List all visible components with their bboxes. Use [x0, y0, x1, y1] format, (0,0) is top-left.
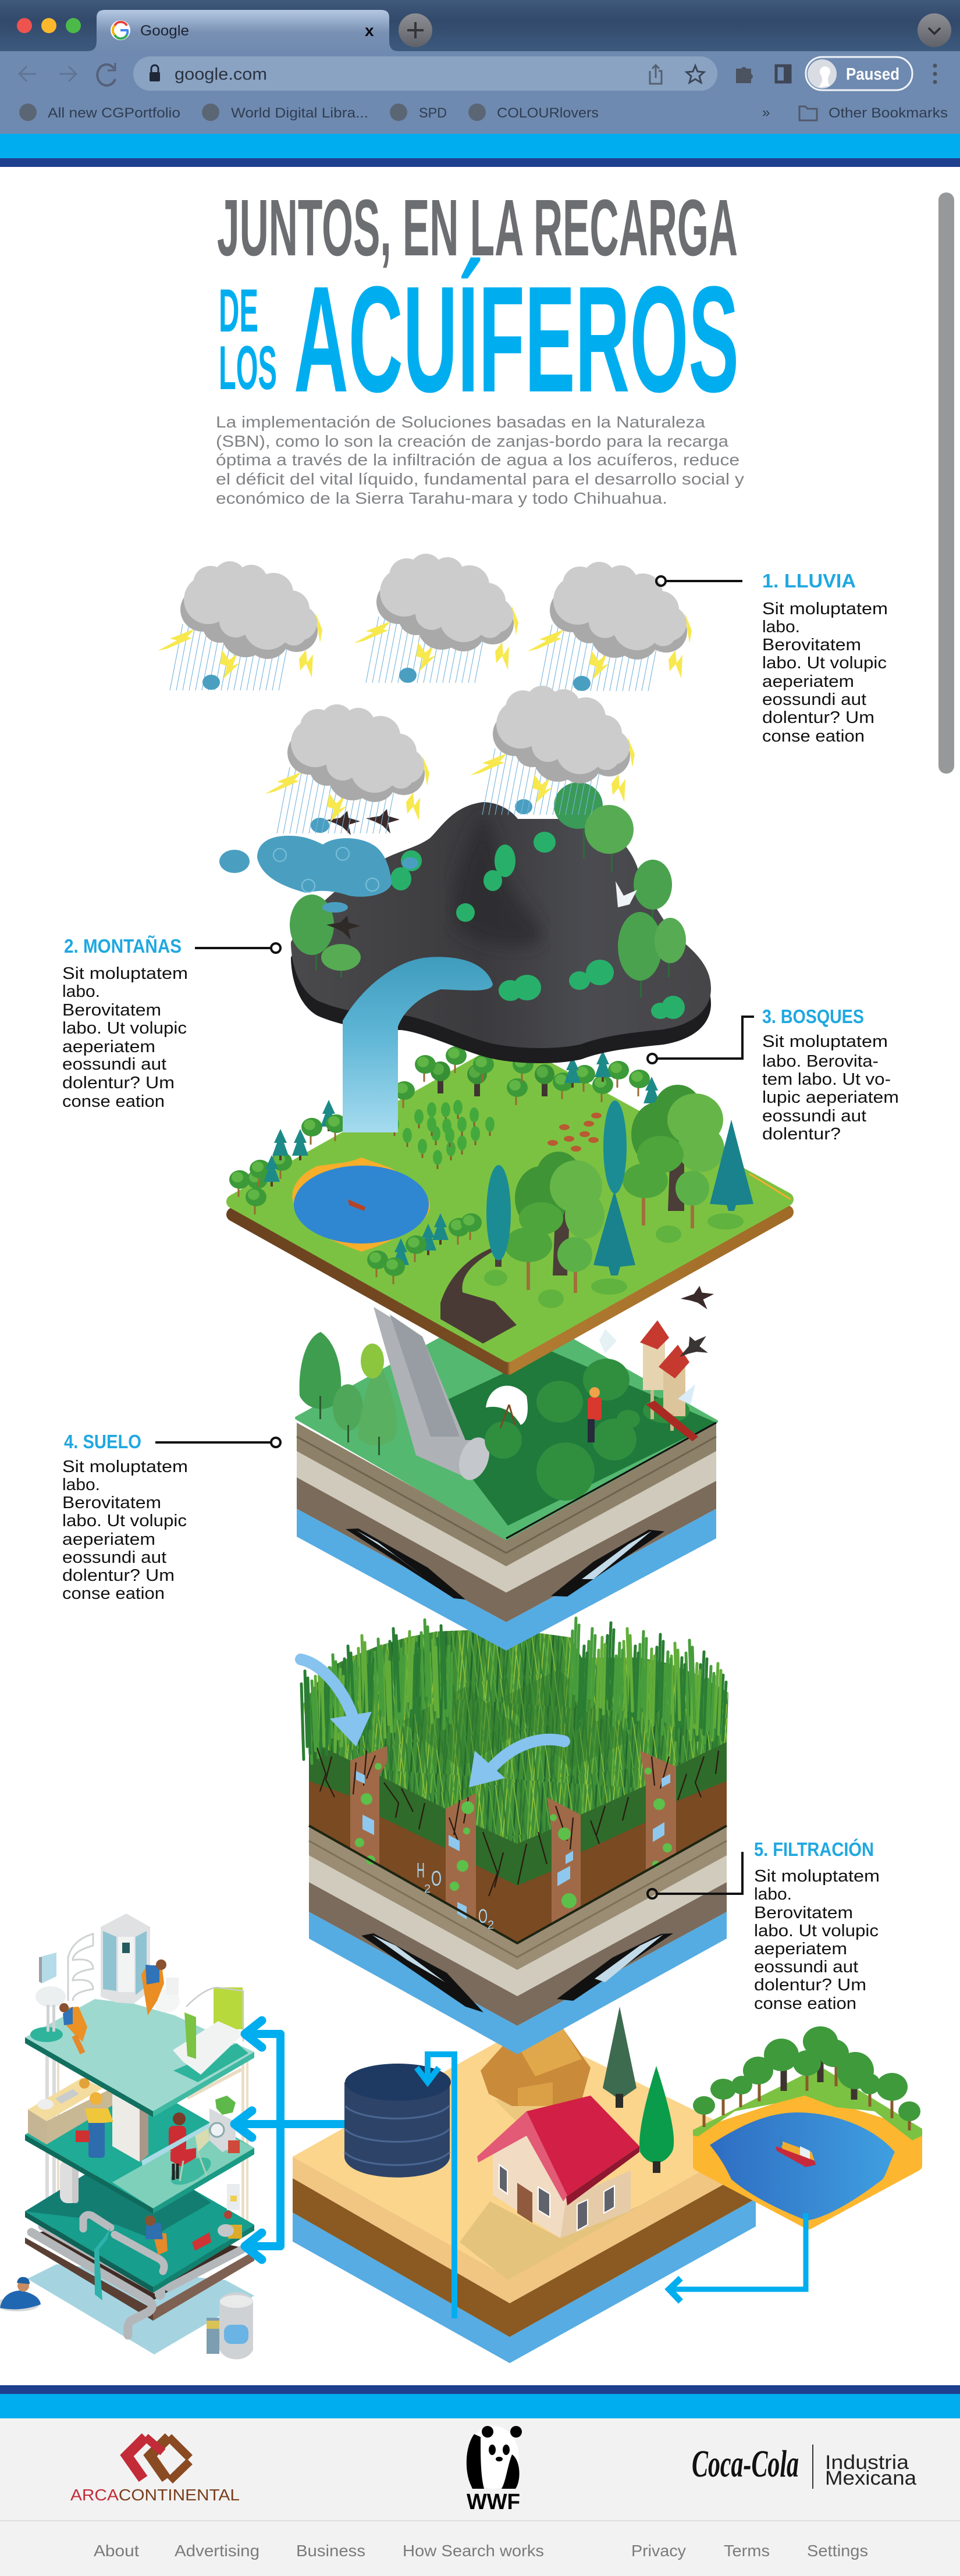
mountain ridge shadow [453, 814, 542, 947]
footer links: Settings [807, 2542, 868, 2560]
black soil line [309, 1826, 727, 1943]
intro paragraph: (SBN), como lo son la creación de zanjas-bordo para la recarga [216, 432, 728, 450]
label: forests [648, 1006, 899, 1143]
footer links: About [94, 2542, 139, 2560]
grass shadow patches [401, 1669, 634, 1768]
small trees [229, 1046, 660, 1284]
label: mountains: aeperiatem [62, 1038, 155, 1056]
bath and curtains [173, 1987, 244, 2075]
towel radiator [68, 1934, 93, 2001]
logo: WWF panda: WWF [467, 2490, 520, 2514]
label: filtration: dolentur? Um [754, 1976, 866, 1994]
ground slab [27, 2264, 254, 2354]
H2O label: H [417, 1858, 425, 1882]
birds [326, 809, 637, 940]
active tab: Google [140, 23, 189, 39]
label: soil: labo. [62, 1476, 100, 1494]
kitchen counter [28, 2078, 112, 2144]
new tab button [399, 13, 432, 47]
birdhouses [640, 1320, 689, 1431]
label: forests: tem labo. Ut vo- [762, 1070, 891, 1089]
water barrel [344, 2064, 451, 2178]
arrow: infiltration right [469, 1740, 564, 1787]
plumber at sink [59, 2003, 87, 2053]
logo: Coca-Cola Industria Mexicana: Industria [825, 2452, 909, 2474]
label: mountains: Sit moluptatem [62, 964, 188, 983]
reservoir lake with hill [693, 2026, 922, 2224]
bookmarks bar: COLOURlovers [497, 105, 599, 121]
label: filtration: conse eation [754, 1994, 856, 2013]
middle floor [25, 2088, 254, 2214]
soil columns [350, 1746, 676, 1924]
trees left [300, 1332, 397, 1455]
boiler [60, 2160, 79, 2203]
filter tank [207, 2292, 253, 2359]
top color band [0, 134, 960, 167]
gardener [588, 1387, 602, 1442]
label: forests: 3. BOSQUES [762, 1006, 864, 1027]
arrow: infiltration left [301, 1659, 372, 1747]
label: forests: lupic aeperiatem [762, 1088, 899, 1107]
water channel [141, 2123, 209, 2166]
sewer pipes [31, 2226, 243, 2335]
O2 label: O [478, 1905, 488, 1927]
soil [309, 1739, 727, 1943]
label: forests: Sit moluptatem [762, 1032, 888, 1051]
mountain base [291, 817, 711, 1063]
brown layer [309, 1882, 727, 2026]
round bushes [484, 1213, 744, 1308]
waterfall [343, 957, 493, 1132]
label: forests: dolentur? [762, 1125, 841, 1143]
title: LOS [219, 333, 277, 402]
label: soil: aeperiatem [62, 1530, 155, 1549]
title: DE [219, 277, 258, 345]
label: filtration: labo. [754, 1885, 792, 1904]
roots [317, 1748, 719, 1896]
water squares [356, 1771, 670, 1919]
logo: WWF panda [467, 2426, 522, 2514]
intro paragraph: económico de la Sierra Tarahu-mara y todo Chihuahua. [216, 489, 667, 507]
label: soil: Sit moluptatem [62, 1458, 188, 1476]
mountain trees [290, 782, 686, 997]
gravel layer [309, 1855, 727, 1996]
rug [166, 2152, 215, 2190]
label: mountains: Berovitatem [62, 1001, 161, 1020]
mountain top [291, 802, 711, 1048]
footer links: Business [296, 2542, 365, 2560]
label: rain: Berovitatem [762, 636, 861, 654]
label: mountains: conse eation [62, 1092, 165, 1111]
sink [35, 1986, 66, 2032]
footer links [94, 2542, 868, 2560]
bookmarks bar: All new CGPortfolio [48, 105, 180, 121]
label: filtration: labo. Ut volupic [754, 1922, 879, 1940]
intro paragraph: óptima a través de la infiltración de agua a los acuíferos, reduce [216, 451, 739, 469]
illustration: building with water use [0, 1914, 254, 2359]
plumber in kitchen [76, 2092, 113, 2158]
footer links: Privacy [631, 2542, 686, 2560]
bottom color band [0, 2385, 960, 2418]
house shadow [460, 2201, 643, 2280]
woman ironing [169, 2112, 209, 2181]
arrow: lake to aquifer [669, 2213, 806, 2301]
drainage pipe [374, 1307, 495, 1484]
footer links: Advertising [175, 2542, 259, 2560]
cloud two [354, 554, 518, 683]
H2O label: 2 [424, 1883, 431, 1896]
label: rain [656, 570, 888, 746]
label: mountains: dolentur? Um [62, 1074, 175, 1092]
label: rain: labo. [762, 618, 800, 636]
mirror [39, 1953, 56, 1983]
label: rain: dolentur? Um [762, 708, 874, 727]
caves [346, 1529, 664, 1599]
white umbrella [486, 1386, 528, 1428]
water leak [94, 2228, 111, 2300]
cloud four [265, 704, 429, 833]
base platform: sand, earth and aquifer [293, 2007, 756, 2363]
navigation icons [19, 63, 115, 85]
logo: Coca-Cola Industria Mexicana [692, 2443, 916, 2489]
pump and panel [218, 2184, 242, 2239]
label: filtration: Sit moluptatem [754, 1867, 880, 1886]
O2 label: 2 [488, 1919, 494, 1932]
blue aquifer layer [309, 1912, 727, 2054]
label: filtration: aeperiatem [754, 1940, 847, 1958]
bookmarks bar: World Digital Libra... [231, 105, 368, 121]
grass base [303, 1629, 728, 1844]
green hill [693, 2066, 922, 2140]
floor pipes [83, 2215, 164, 2271]
fridge [112, 2094, 148, 2162]
ship [776, 2137, 816, 2167]
bookmarks bar: Other Bookmarks [829, 105, 948, 121]
label: rain: eossundi aut [762, 690, 866, 709]
label: soil [62, 1431, 280, 1603]
label: filtration [648, 1839, 880, 2013]
building columns [45, 2053, 56, 2207]
label: mountains: 2. MONTAÑAS [64, 935, 182, 957]
address bar [133, 56, 717, 91]
mountain bushes [390, 832, 685, 1019]
label: mountains: labo. Ut volupic [62, 1019, 187, 1038]
panel: soil layers block [297, 1303, 716, 1651]
green cypress tree [639, 2066, 674, 2173]
label: forests: eossundi aut [762, 1107, 866, 1125]
water [710, 2112, 895, 2221]
lake [292, 1157, 430, 1252]
label: filtration: Berovitatem [754, 1904, 853, 1922]
label: rain: conse eation [762, 727, 865, 746]
label: rain: aeperiatem [762, 672, 854, 691]
panel: filtration soil block [301, 1618, 728, 2054]
panel: mountain island [219, 782, 711, 1132]
label: filtration: eossundi aut [754, 1958, 858, 1976]
bird [679, 1284, 716, 1314]
arrow into barrel [417, 2054, 454, 2318]
nutrient dots [355, 1763, 672, 1908]
intro paragraph: el déficit del vital líquido, fundamental para el desarrollo social y [216, 470, 744, 488]
intro paragraph [216, 413, 744, 507]
footer divider [0, 2520, 960, 2521]
tan layer [309, 1826, 727, 1970]
active tab [87, 10, 399, 51]
address bar: google.com [175, 65, 267, 84]
label: soil: Berovitatem [62, 1494, 161, 1512]
washing machine [209, 2096, 240, 2153]
logo: Coca-Cola Industria Mexicana: Mexicana [825, 2467, 916, 2489]
shower cabin [101, 1914, 150, 2004]
mountain pond [219, 799, 532, 913]
hill trees [693, 2026, 920, 2130]
yellow road [749, 1174, 791, 1199]
active tab: x [365, 22, 374, 40]
footer links: Terms [724, 2542, 770, 2560]
label: soil: eossundi aut [62, 1548, 166, 1567]
house [477, 2096, 639, 2238]
cloud one [158, 561, 322, 690]
tool box [192, 2232, 211, 2251]
bushes [485, 1359, 689, 1501]
top floor [25, 1999, 254, 2117]
window buttons [17, 18, 81, 33]
label: mountains [62, 935, 280, 1111]
rock cliff [440, 1245, 517, 1344]
paused profile pill: Paused [846, 65, 899, 84]
grass streaks [303, 1629, 728, 1844]
logo: Arca Continental [70, 2437, 240, 2504]
logo: Coca-Cola Industria Mexicana: Coca-Cola [692, 2443, 799, 2485]
label: filtration: 5. FILTRACIÓN [754, 1839, 874, 1860]
intro paragraph: La implementación de Soluciones basadas en la Naturaleza [216, 413, 705, 431]
plumber in manhole [0, 2277, 41, 2311]
label: mountains: eossundi aut [62, 1055, 166, 1074]
toolbar icons [736, 64, 937, 84]
cloud five [470, 686, 635, 815]
bookmarks bar [19, 104, 948, 121]
plumber at toilet [141, 1959, 180, 2015]
caves [361, 1933, 673, 2012]
label: soil: labo. Ut volupic [62, 1512, 187, 1530]
dark cypress tree [603, 2007, 637, 2108]
footer background [0, 2418, 960, 2576]
root band [309, 1741, 727, 1886]
bookmarks bar: » [762, 105, 770, 120]
clouds and rain [158, 554, 692, 833]
arrows: water distribution to building [234, 2021, 352, 2260]
green top surface [297, 1303, 716, 1538]
platform side [233, 1060, 787, 1368]
brown foundation [25, 2222, 254, 2321]
rocks [481, 2029, 593, 2129]
plumber on bottom floor [145, 2215, 168, 2255]
label: mountains: labo. [62, 982, 100, 1001]
label: rain: Sit moluptatem [762, 600, 888, 618]
label: soil: conse eation [62, 1584, 165, 1603]
water pipe [187, 2069, 241, 2098]
browser chrome [0, 0, 960, 134]
cattle [547, 1113, 602, 1152]
H2O label: O [431, 1866, 442, 1890]
orange shore [699, 2100, 916, 2224]
label: soil: dolentur? Um [62, 1566, 175, 1585]
bottom floor [25, 2174, 254, 2293]
grass blades [301, 1618, 726, 1763]
tabs dropdown [918, 13, 951, 47]
bookmarks bar: SPD [419, 105, 447, 121]
red path [646, 1401, 698, 1441]
scrollbar [938, 193, 954, 774]
title [217, 183, 739, 424]
platform top [233, 1047, 787, 1355]
logo: Arca Continental: ARCACONTINENTAL [70, 2486, 240, 2504]
big trees [486, 1085, 753, 1293]
panel: forest platform [229, 1046, 791, 1368]
paused profile pill [806, 57, 912, 90]
label: soil: 4. SUELO [64, 1431, 141, 1452]
label: rain: 1. LLUVIA [762, 570, 856, 592]
footer links: How Search works [403, 2542, 544, 2560]
birds [599, 1328, 715, 1405]
H2O label [417, 1858, 442, 1896]
label: forests: labo. Berovita- [762, 1052, 879, 1071]
label: rain: labo. Ut volupic [762, 654, 887, 672]
cloud three [527, 562, 692, 691]
